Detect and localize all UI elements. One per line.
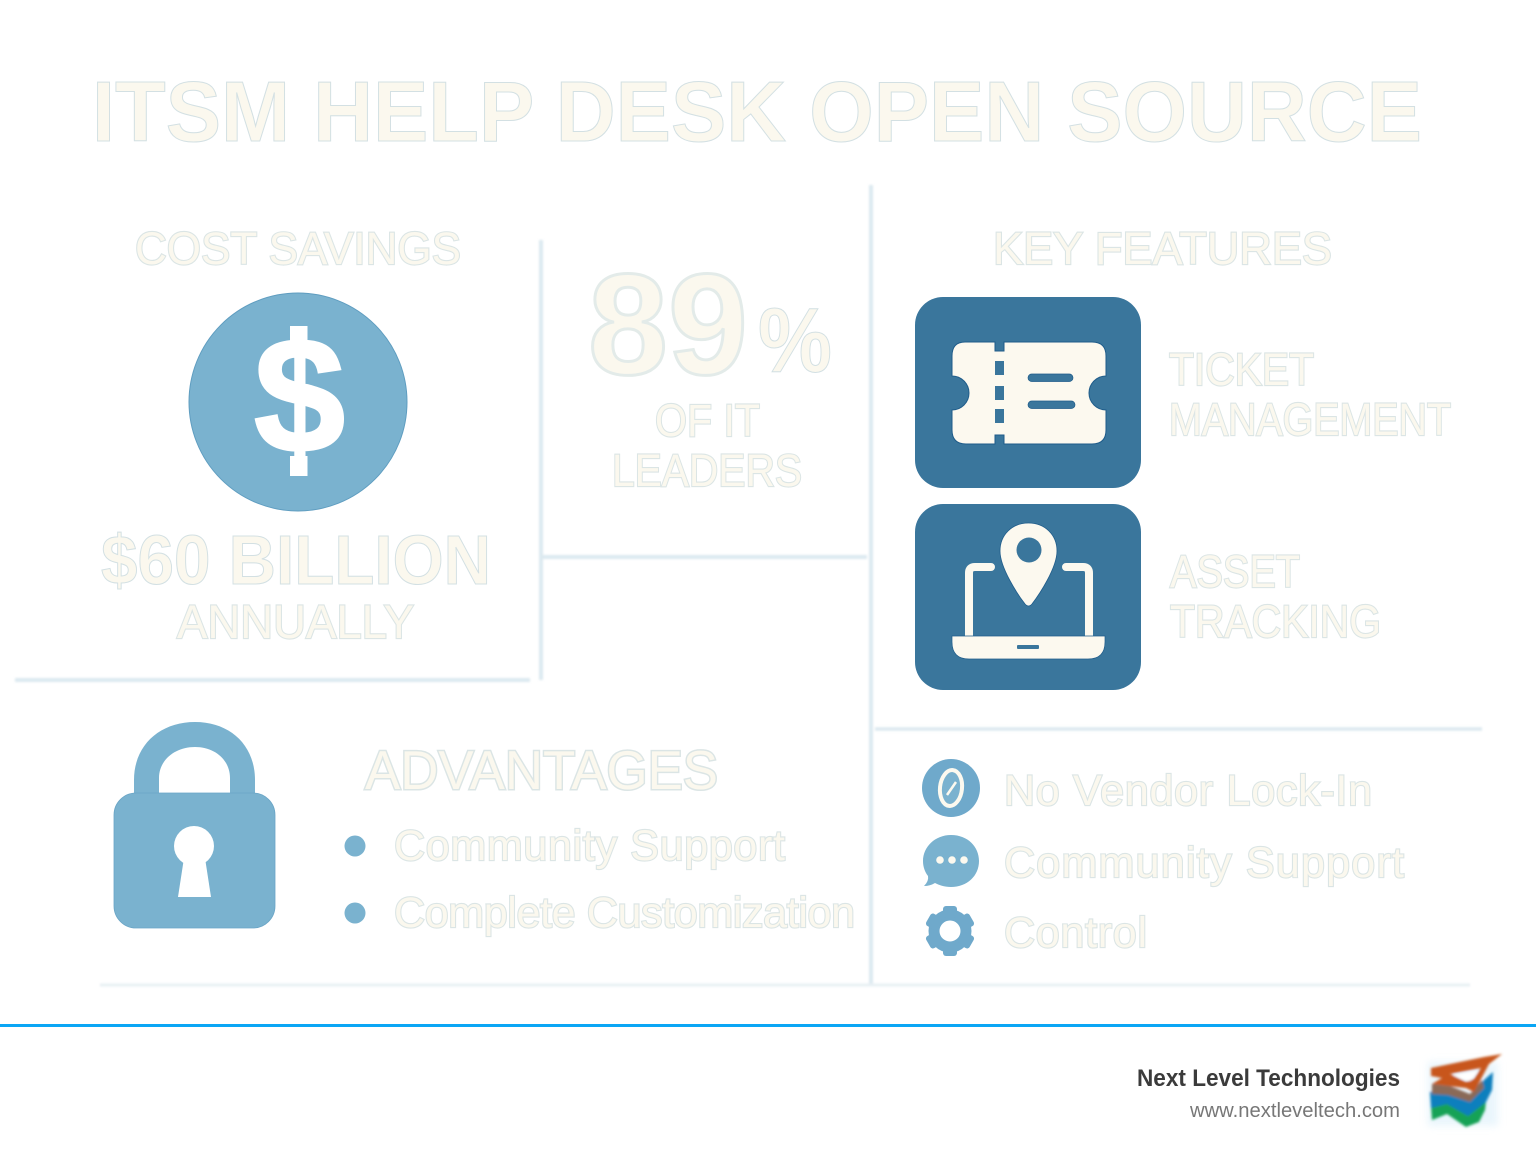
stat label: leaders: LEADERS xyxy=(612,445,802,496)
stat: 89 percent xyxy=(588,244,832,405)
icon: unlock badge xyxy=(922,759,980,817)
footer rule xyxy=(0,1024,1536,1027)
bullet: complete customization: Complete Customization xyxy=(394,889,855,937)
bullet: community support: Community Support xyxy=(394,822,785,870)
icon: asset tracking laptop pin xyxy=(915,504,1141,690)
item: no vendor lock-in xyxy=(922,759,1372,817)
stat: 89 percent: % xyxy=(758,290,832,392)
heading: advantages: ADVANTAGES xyxy=(365,739,718,801)
logo xyxy=(1428,1054,1502,1127)
item: no vendor lock-in: No Vendor Lock-In xyxy=(1004,767,1372,815)
icon: chat bubble xyxy=(923,835,979,887)
panel: cost savings xyxy=(101,223,491,648)
title: ITSM HELP DESK OPEN SOURCE xyxy=(92,65,1422,160)
panel: 89 percent of IT leaders xyxy=(588,244,832,496)
panel: advantages xyxy=(114,722,855,937)
item: control: Control xyxy=(1004,909,1147,957)
icon: padlock xyxy=(114,722,275,928)
item: control xyxy=(925,906,1147,957)
footer brand xyxy=(1137,1054,1502,1127)
icon: dollar coin: $ xyxy=(254,304,345,487)
icon: gear xyxy=(925,906,975,956)
brand url: www.nextleveltech.com xyxy=(1189,1100,1400,1122)
panel: key features xyxy=(915,223,1451,690)
label: asset tracking: ASSET xyxy=(1170,546,1300,597)
brand name: Next Level Technologies xyxy=(1137,1065,1400,1092)
stat label: annually: ANNUALLY xyxy=(177,595,414,648)
icon: ticket xyxy=(915,297,1141,488)
panel: benefits list xyxy=(922,759,1404,957)
item: community support: Community Support xyxy=(1004,839,1404,887)
label: ticket management xyxy=(1169,344,1451,445)
label: ticket management: TICKET xyxy=(1169,344,1314,395)
stat: 89 percent: 89 xyxy=(588,244,748,405)
heading: key features: KEY FEATURES xyxy=(993,223,1332,274)
stat label: of it: OF IT xyxy=(655,395,760,446)
label: ticket management: MANAGEMENT xyxy=(1169,394,1451,445)
label: asset tracking xyxy=(1170,546,1381,647)
icon: dollar coin xyxy=(189,293,407,511)
heading: cost savings: COST SAVINGS xyxy=(135,223,461,274)
label: asset tracking: TRACKING xyxy=(1170,596,1381,647)
stat: 60 billion: $60 BILLION xyxy=(101,521,491,599)
